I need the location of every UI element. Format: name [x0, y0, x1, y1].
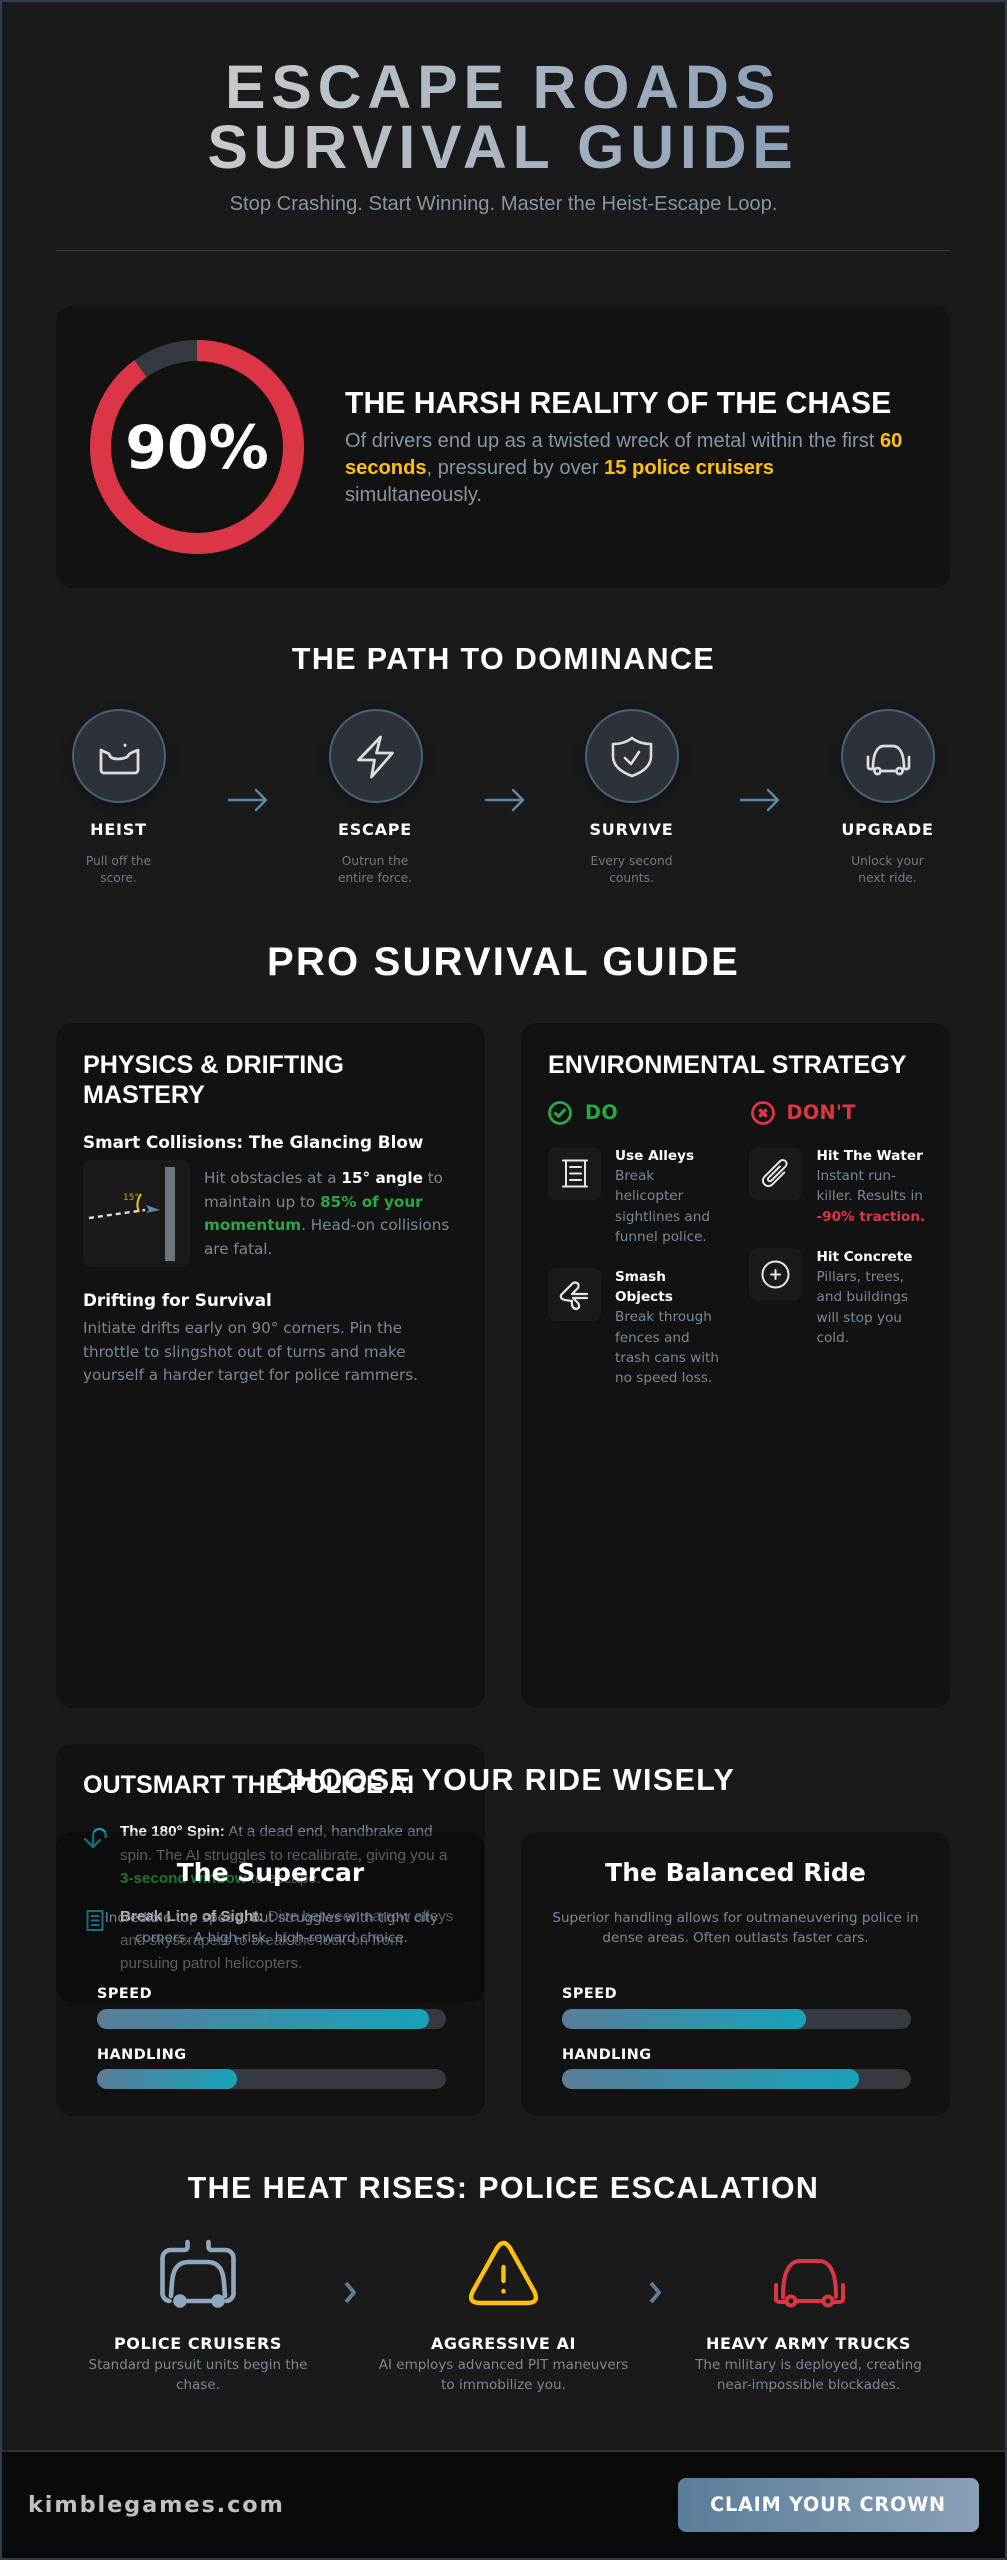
- description: [590, 854, 672, 885]
- text: fences and: [615, 1330, 690, 1346]
- heading: THE HARSH REALITY OF THE CHASE: [345, 387, 891, 420]
- label: heavy army trucks: HEAVY ARMY TRUCKS: [706, 2334, 911, 2353]
- label: UPGRADE: [841, 820, 934, 838]
- text: Hit The Water: [816, 1148, 923, 1164]
- description: Incredible top speed, but struggles with tight city: [105, 1910, 438, 1926]
- text: collisions: are fatal.: [204, 1240, 272, 1258]
- stat: handling: HANDLING: [97, 2047, 187, 2063]
- label: ESCAPE: [338, 820, 412, 838]
- heading: pro survival guide: PRO SURVIVAL GUIDE: [267, 940, 740, 984]
- button: CLAIM YOUR CROWN: [710, 2493, 946, 2516]
- title: [203, 57, 803, 177]
- footer: [0, 2450, 1007, 2560]
- description: [345, 430, 902, 506]
- text: Smash: [615, 1269, 666, 1285]
- text: no speed loss.: [615, 1370, 712, 1386]
- description: heavy army trucks: near-impossible blockades.: [717, 2377, 900, 2393]
- text: drifting: yourself a harder target for police rammers.: [83, 1366, 418, 1384]
- subtitle: Stop Crashing. Start Winning. Master the Heist-Escape Loop.: [230, 193, 777, 215]
- description: aggressive ai: to immobilize you.: [441, 2377, 566, 2393]
- subheading: drifting: Drifting for Survival: [83, 1290, 272, 1310]
- icon: check circle: [548, 1101, 572, 1125]
- text: will stop you: [816, 1310, 902, 1326]
- arrow: [740, 788, 780, 812]
- chevron: [344, 2282, 356, 2304]
- description: simultaneously.: [345, 484, 482, 506]
- label: police cruisers: POLICE CRUISERS: [114, 2334, 282, 2353]
- bar: handling 85%: [562, 2069, 911, 2089]
- description: [338, 854, 412, 885]
- text: collisions: momentum. Head-on collisions: [204, 1216, 449, 1234]
- text: 180 spin: [120, 1823, 448, 1887]
- icon: smash: [548, 1268, 601, 1321]
- description: Every second: [590, 854, 672, 868]
- description: seconds, pressured by over 15 police cruisers: [345, 456, 774, 478]
- text: [615, 1148, 710, 1245]
- text: Use Alleys: [615, 1148, 694, 1164]
- description: Unlock your: [851, 854, 924, 868]
- panel: the balanced ride: [521, 1832, 950, 2116]
- description: [86, 854, 151, 885]
- heading: police escalation: THE HEAT RISES: POLICE ESCALATION: [188, 2171, 819, 2205]
- text: 180 spin: 3-second window to escape.: [120, 1870, 321, 1887]
- description: counts.: [609, 871, 654, 885]
- don't header: [751, 1101, 856, 1125]
- description: [105, 1910, 438, 1946]
- description: police cruisers: chase.: [176, 2377, 220, 2393]
- panel: harsh reality: [56, 306, 950, 588]
- step: heist: [72, 709, 166, 885]
- step: upgrade: [841, 709, 935, 885]
- description: aggressive ai: AI employs advanced PIT maneuvers: [379, 2357, 628, 2373]
- description: heavy army trucks: [658, 2355, 958, 2395]
- text: drifting: throttle to slingshot out of turns and make: [83, 1342, 406, 1360]
- heading: path to dominance: THE PATH TO DOMINANCE: [292, 642, 715, 676]
- icon: survive: [585, 709, 679, 803]
- description: heavy army trucks: The military is deployed, creating: [695, 2357, 922, 2373]
- text: funnel police.: [615, 1229, 707, 1245]
- bar: speed 95%: [97, 2009, 446, 2029]
- text: drifting: Initiate drifts early on 90° corners. Pin the: [83, 1319, 402, 1337]
- label: SURVIVE: [589, 820, 674, 838]
- item: use alleys: [562, 1148, 710, 1245]
- description: next ride.: [858, 871, 917, 885]
- text: and buildings: [816, 1289, 908, 1305]
- description: Outrun the: [342, 854, 408, 868]
- heading: PHYSICS & DRIFTING: [83, 1050, 344, 1078]
- text: [816, 1249, 912, 1346]
- donut chart: 90%: [90, 340, 304, 554]
- label: HEIST: [90, 820, 147, 838]
- text: sightlines and: [615, 1209, 710, 1225]
- icon: warning triangle: [468, 2240, 538, 2306]
- heading: choose your ride wisely: CHOOSE YOUR RIDE WISELY: [272, 1763, 735, 1797]
- text: helicopter: [615, 1188, 683, 1204]
- icon: heist: [72, 709, 166, 803]
- bar: speed 70%: [562, 2009, 911, 2029]
- arrow: [228, 788, 268, 812]
- text: 180 spin: The 180° Spin: At a dead end, handbrake and: [120, 1823, 433, 1840]
- panel: outsmart the police ai: [56, 1744, 485, 2002]
- text: line of sight: Break Line of Sight: Dive between narrow alleys: [120, 1908, 453, 1925]
- icon: upgrade: [841, 709, 935, 803]
- text: Hit Concrete: [816, 1249, 912, 1265]
- icon: paperclip: [749, 1147, 802, 1200]
- title: ESCAPE ROADS: [225, 53, 781, 121]
- stat: handling: HANDLING: [562, 2047, 652, 2063]
- icon: army truck: [774, 2259, 845, 2308]
- diagram: 15 degree collision: 15°: [123, 1193, 139, 1203]
- stat: speed: SPEED: [97, 1986, 152, 2002]
- description: police cruisers: [48, 2355, 348, 2395]
- icon: u-turn: [84, 1828, 107, 1848]
- icon: escape: [328, 709, 422, 803]
- icon: document: [86, 1910, 104, 1931]
- panel: physics and drifting: [56, 1023, 485, 1708]
- heading: [83, 1050, 344, 1109]
- text: Objects: [615, 1289, 673, 1305]
- heading: MASTERY: [83, 1081, 205, 1109]
- title: The Balanced Ride: [605, 1858, 866, 1887]
- item: smash objects: [560, 1269, 719, 1386]
- arrow: [484, 788, 524, 812]
- label: DO: [585, 1101, 618, 1124]
- description: [552, 1910, 919, 1946]
- text: drifting: [83, 1319, 418, 1384]
- button: [678, 2478, 978, 2532]
- diagram: 15 degree collision: [88, 1167, 175, 1261]
- text: collisions: [204, 1169, 449, 1258]
- icon: alleys: [548, 1147, 601, 1200]
- description: police cruisers: Standard pursuit units begin the: [88, 2357, 308, 2373]
- heading: ENVIRONMENTAL STRATEGY: [548, 1050, 907, 1078]
- text: line of sight: [120, 1908, 453, 1972]
- do header: [548, 1101, 618, 1125]
- donut chart: 90%: 90%: [125, 413, 269, 483]
- text: trash cans with: [615, 1350, 719, 1366]
- step: survive: [585, 709, 679, 885]
- bar: handling 40%: [97, 2069, 446, 2089]
- text: [816, 1148, 925, 1225]
- description: aggressive ai: [354, 2355, 654, 2395]
- icon: plus circle: [749, 1248, 802, 1301]
- description: Pull off the: [86, 854, 151, 868]
- brand: kimblegames.com: [28, 2492, 285, 2518]
- title: The Supercar: [177, 1858, 364, 1887]
- text: Instant run-: [816, 1168, 896, 1184]
- icon: police cruiser: [160, 2240, 236, 2308]
- item: hit the water: [762, 1148, 925, 1225]
- text: line of sight: and skyscrapers to break the lock-on from: [120, 1932, 403, 1949]
- subheading: smart collisions: Smart Collisions: The Glancing Blow: [83, 1132, 423, 1152]
- text: cold.: [816, 1330, 849, 1346]
- text: Break through: [615, 1309, 712, 1325]
- text: collisions: Hit obstacles at a 15° angle to: [204, 1169, 443, 1187]
- heading: OUTSMART THE POLICE AI: [83, 1771, 414, 1799]
- text: 180 spin: spin. The AI struggles to recalibrate, giving you a: [120, 1847, 447, 1864]
- text: [615, 1269, 719, 1386]
- text: line of sight: pursuing patrol helicopters.: [120, 1955, 302, 1972]
- text: Pillars, trees,: [816, 1269, 904, 1285]
- description: score.: [100, 871, 137, 885]
- description: dense areas. Often outlasts faster cars.: [602, 1930, 869, 1946]
- label: aggressive ai: AGGRESSIVE AI: [431, 2334, 576, 2353]
- label: DON'T: [786, 1101, 856, 1124]
- panel: the supercar: [56, 1832, 485, 2116]
- panel: environmental strategy: [521, 1023, 950, 1708]
- text: killer. Results in: [816, 1188, 923, 1204]
- text: -90% traction.: [816, 1209, 925, 1225]
- text: collisions: maintain up to 85% of your: [204, 1192, 423, 1210]
- step: escape: [329, 709, 423, 885]
- item: hit concrete: [762, 1249, 912, 1346]
- description: entire force.: [338, 871, 412, 885]
- title: SURVIVAL GUIDE: [207, 113, 799, 181]
- icon: x circle: [751, 1101, 775, 1125]
- description: corners. A high-risk, high-reward choice.: [135, 1930, 408, 1946]
- chevron: [650, 2282, 661, 2304]
- description: Superior handling allows for outmaneuvering police in: [552, 1910, 919, 1926]
- description: Of drivers end up as a twisted wreck of metal within the first 60: [345, 430, 902, 452]
- description: [851, 854, 924, 885]
- text: Break: [615, 1168, 654, 1184]
- stat: speed: SPEED: [562, 1986, 617, 2002]
